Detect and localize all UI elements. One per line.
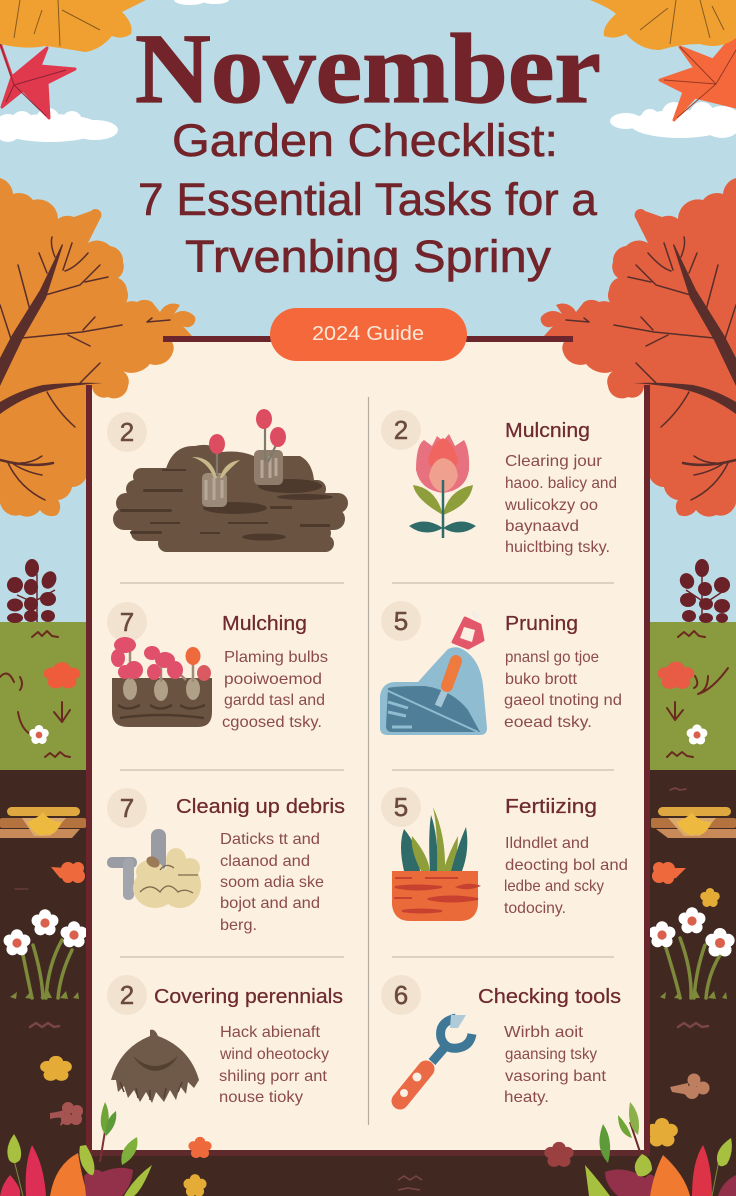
body text: huicltbing tsky. xyxy=(505,539,610,556)
soil doodles left xyxy=(15,889,59,1027)
body text: Plaming bulbs xyxy=(224,649,328,666)
body text xyxy=(504,649,622,731)
body text: bojot and and xyxy=(220,895,320,912)
body text: gardd tasl and xyxy=(224,692,325,709)
task 6: fertilizing: 5 xyxy=(394,792,408,822)
orange leaf left xyxy=(51,862,85,883)
body text: gaeol tnoting nd xyxy=(504,692,622,709)
daisies right xyxy=(649,907,735,999)
heading: Mulcning xyxy=(505,420,590,442)
maroon leaf xyxy=(84,1168,133,1196)
body text: Daticks tt and xyxy=(220,831,320,848)
bush right xyxy=(677,559,730,623)
top-left corner leaves xyxy=(0,0,146,118)
body text: claanod and xyxy=(220,853,310,870)
icon: debris pile xyxy=(107,829,201,908)
body text: shiling porr ant xyxy=(219,1068,328,1085)
heading: Pruning xyxy=(505,613,578,635)
heading: Covering perennials xyxy=(154,986,343,1008)
orange leaf right xyxy=(652,862,686,884)
red flower right xyxy=(658,662,694,689)
body text: pnansl go tjoe xyxy=(505,649,599,666)
red flower left xyxy=(44,662,80,688)
body text: nouse tioky xyxy=(219,1089,303,1106)
body text: Ildndlet and xyxy=(505,835,589,852)
icon: wrench tool xyxy=(400,1015,472,1101)
pink leaves xyxy=(0,1145,46,1196)
small soil squiggle xyxy=(398,1176,422,1190)
bottom-right foliage xyxy=(544,1102,736,1196)
left side decorations xyxy=(0,559,87,1126)
body text: soom adia ske xyxy=(220,874,324,891)
body text xyxy=(504,453,617,556)
task 8: checking tools: 6 xyxy=(394,980,408,1010)
mauve flower left xyxy=(50,1102,83,1126)
sky background xyxy=(0,0,736,622)
grass doodles left xyxy=(0,631,70,757)
icon: potted plant xyxy=(392,807,478,921)
subtitle line 2: 7 Essential Tasks for a xyxy=(138,174,598,225)
clouds xyxy=(0,0,736,142)
tan flower right xyxy=(670,1074,710,1099)
body text xyxy=(222,649,328,731)
lime leaf xyxy=(7,1134,21,1163)
heading: Mulching xyxy=(222,613,307,635)
body text: heaty. xyxy=(504,1089,549,1106)
grass doodles right xyxy=(667,631,728,757)
heading: Cleanig up debris xyxy=(176,796,345,818)
task 3: planting bulbs xyxy=(107,602,328,731)
lime leaf xyxy=(79,1145,94,1175)
yellow flower bottom xyxy=(183,1174,207,1196)
number badge: 2 xyxy=(120,417,134,447)
red leaf xyxy=(692,1145,712,1196)
bush left xyxy=(4,559,59,623)
number badge xyxy=(107,412,147,452)
body text xyxy=(504,835,628,917)
panel xyxy=(89,339,647,1153)
body text: Wirbh aoit xyxy=(504,1024,584,1041)
green sprig xyxy=(599,1102,640,1163)
orange leaf xyxy=(0,0,146,52)
title xyxy=(135,13,601,282)
heading: Fertiizing xyxy=(505,796,597,818)
yellow small flower right xyxy=(700,888,720,907)
body text xyxy=(220,831,324,934)
grass band xyxy=(0,622,736,770)
body text: deocting bol and xyxy=(505,857,628,874)
task 4: pruning: 5 xyxy=(394,606,408,636)
body text xyxy=(219,1024,329,1106)
maroon leaf xyxy=(605,1170,656,1196)
body text: cgoosed tsky. xyxy=(222,714,322,731)
yellow flower left xyxy=(40,1056,72,1081)
left tree xyxy=(0,178,195,517)
body text: vasoring bant xyxy=(505,1068,607,1085)
body text: buko brott xyxy=(505,671,578,688)
right tree xyxy=(541,178,736,517)
panel top border xyxy=(163,336,573,342)
body text: todociny. xyxy=(504,900,566,917)
body text: Clearing jour xyxy=(505,453,603,470)
badge: 2024 guide: 2024 Guide xyxy=(312,323,424,345)
lime leaf xyxy=(635,1154,652,1176)
body text: baynaavd xyxy=(505,518,579,535)
white flower left xyxy=(29,725,49,744)
body text: Hack abienaft xyxy=(220,1024,321,1041)
task 1: soil with bulbs xyxy=(107,409,348,552)
icon: planter xyxy=(111,637,212,727)
daisies left xyxy=(4,909,87,999)
task 8: checking tools xyxy=(381,975,621,1106)
panel side borders over trees xyxy=(89,385,647,1153)
top-right corner leaves xyxy=(590,0,736,120)
icon: shovel xyxy=(380,612,487,735)
soil band xyxy=(0,770,736,1196)
icon: mulch dome xyxy=(111,1030,199,1103)
task 5: cleaning up debris xyxy=(107,788,345,934)
orange leaf xyxy=(650,1155,690,1196)
task 3: planting bulbs: 7 xyxy=(120,607,134,637)
lime leaf xyxy=(712,1138,732,1196)
lime spear xyxy=(124,1165,152,1196)
subtitle line 3: Trvenbing Spriny xyxy=(185,231,552,282)
heading: Checking tools xyxy=(478,986,621,1008)
mauve flower on border xyxy=(544,1142,574,1167)
body text: wulicokzy oo xyxy=(504,497,598,514)
body text: eoead tsky. xyxy=(504,714,592,731)
body text: haoo. balicy and xyxy=(505,475,617,492)
body text: pooiwoemod xyxy=(224,671,322,688)
orange-red leaf xyxy=(660,33,736,120)
task 6: fertilizing xyxy=(381,787,628,921)
golden leaf xyxy=(590,0,736,50)
dividers xyxy=(120,397,614,1125)
soil doodles right xyxy=(670,788,708,1027)
panel bottom border on soil xyxy=(86,1150,650,1156)
task 4: pruning xyxy=(380,601,622,735)
orange flower on border xyxy=(188,1137,212,1158)
title: November: November xyxy=(135,13,601,124)
task 5: cleaning up debris: 7 xyxy=(120,793,134,823)
body text xyxy=(504,1024,607,1106)
task 2: mulching: 2 xyxy=(394,415,408,445)
badge: 2024 guide xyxy=(270,308,467,361)
body text: berg. xyxy=(220,917,257,934)
subtitle line 1: Garden Checklist: xyxy=(172,115,558,166)
yellow flower right xyxy=(646,1118,678,1146)
body text: wind oheotocky xyxy=(219,1046,329,1063)
white flower right xyxy=(687,724,707,745)
body text: ledbe and scky xyxy=(504,878,604,895)
green sprig xyxy=(100,1102,137,1165)
task 2: mulching xyxy=(381,410,617,556)
lime spear xyxy=(585,1165,610,1196)
red leaf xyxy=(0,43,75,118)
right side decorations xyxy=(646,559,736,1146)
basket left xyxy=(0,807,86,838)
basket right xyxy=(651,807,736,838)
orange leaf xyxy=(50,1153,88,1196)
bottom-left foliage xyxy=(0,1102,422,1196)
body text: gaansing tsky xyxy=(505,1046,597,1063)
task 7: covering perennials xyxy=(107,975,343,1106)
icon: tulip xyxy=(409,434,476,538)
maroon corner leaf xyxy=(718,1175,736,1196)
icon: soil bed xyxy=(113,409,348,552)
task 7: covering perennials: 2 xyxy=(120,980,134,1010)
